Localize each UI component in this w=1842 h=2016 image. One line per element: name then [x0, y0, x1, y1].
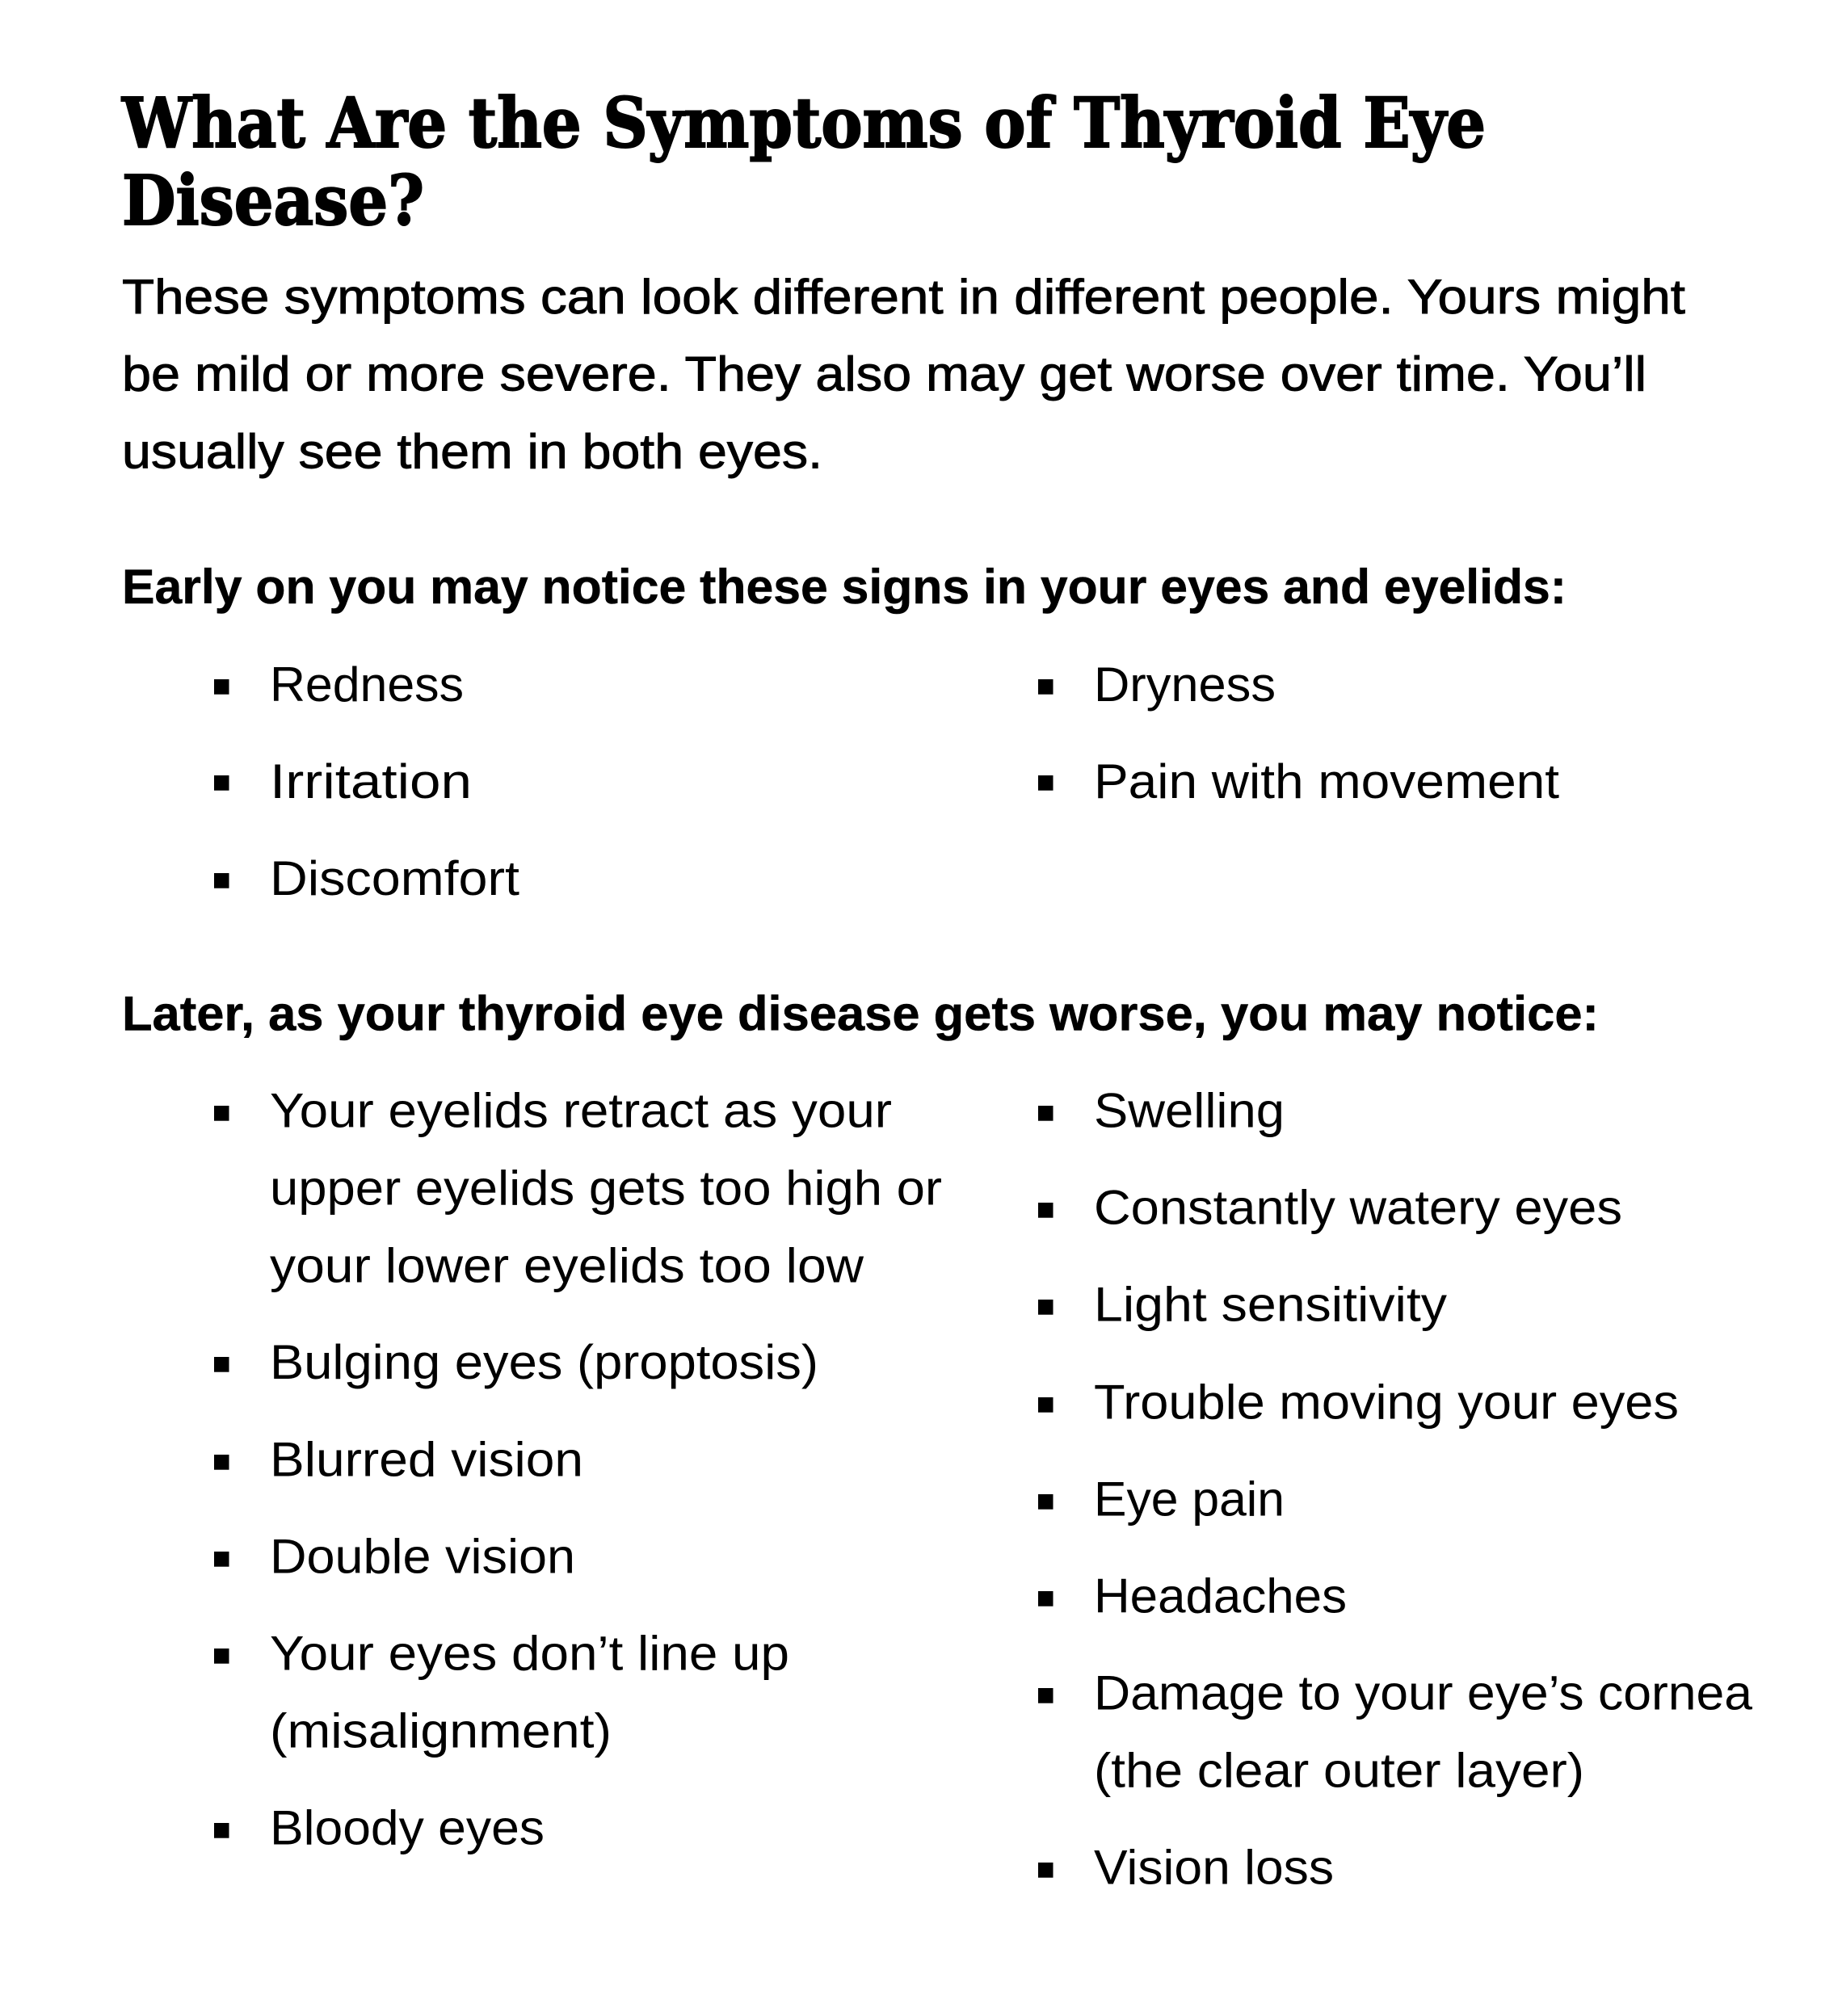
heading: early signs: Early on you may notice these signs in your eyes and eyelids:: [122, 560, 1567, 614]
item: misalignment: Your eyes don’t line up: [270, 1627, 789, 1680]
item: misalignment: [214, 1627, 789, 1758]
item: Swelling: Swelling: [1094, 1084, 1285, 1137]
item: Bulging eyes: Bulging eyes (proptosis): [270, 1335, 818, 1389]
item: cornea damage: (the clear outer layer): [1094, 1743, 1584, 1798]
list: later signs, left column: [214, 1084, 942, 1854]
item: eyelid retraction: your lower eyelids too low: [270, 1239, 864, 1292]
title: Disease?: [122, 161, 424, 242]
item: Light sensitivity: Light sensitivity: [1094, 1278, 1447, 1331]
list: early signs, right column: [1038, 657, 1559, 808]
item: Redness: Redness: [270, 657, 464, 712]
item: Constantly watery eyes: Constantly watery eyes: [1094, 1181, 1622, 1234]
intro paragraph: usually see them in both eyes.: [122, 425, 822, 478]
title: What Are the Symptoms of Thyroid Eye: [121, 83, 1486, 164]
item: Bloody eyes: Bloody eyes: [270, 1801, 545, 1854]
intro paragraph: These symptoms can look different in different people. Yours might: [122, 270, 1685, 324]
item: Eye pain: Eye pain: [1094, 1472, 1285, 1527]
item: eyelid retraction: [214, 1084, 942, 1292]
item: Double vision: Double vision: [270, 1530, 575, 1583]
list: early signs, left column: [214, 657, 519, 905]
item: Headaches: Headaches: [1094, 1569, 1347, 1623]
intro paragraph: [122, 270, 1685, 478]
title: [121, 83, 1486, 242]
item: cornea damage: Damage to your eye’s cornea: [1094, 1665, 1753, 1720]
intro paragraph: be mild or more severe. They also may get worse over time. You’ll: [122, 347, 1646, 401]
item: cornea damage: [1038, 1665, 1753, 1798]
item: Irritation: [214, 754, 472, 808]
item: eyelid retraction: Your eyelids retract as your: [270, 1084, 892, 1137]
item: Dryness: Dryness: [1094, 657, 1276, 712]
heading: later signs: Later, as your thyroid eye disease gets worse, you may notice:: [122, 987, 1599, 1040]
list: later signs, right column: [1038, 1084, 1753, 1895]
item: misalignment: (misalignment): [270, 1704, 612, 1758]
item: eyelid retraction: upper eyelids gets too high or: [270, 1161, 942, 1215]
item: Blurred vision: Blurred vision: [270, 1433, 583, 1486]
item: Discomfort: Discomfort: [270, 851, 519, 905]
item: Irritation: Irritation: [270, 754, 472, 808]
item: Pain with movement: Pain with movement: [1094, 754, 1559, 808]
item: Trouble moving your eyes: Trouble moving your eyes: [1094, 1375, 1679, 1430]
item: Vision loss: Vision loss: [1094, 1840, 1334, 1895]
